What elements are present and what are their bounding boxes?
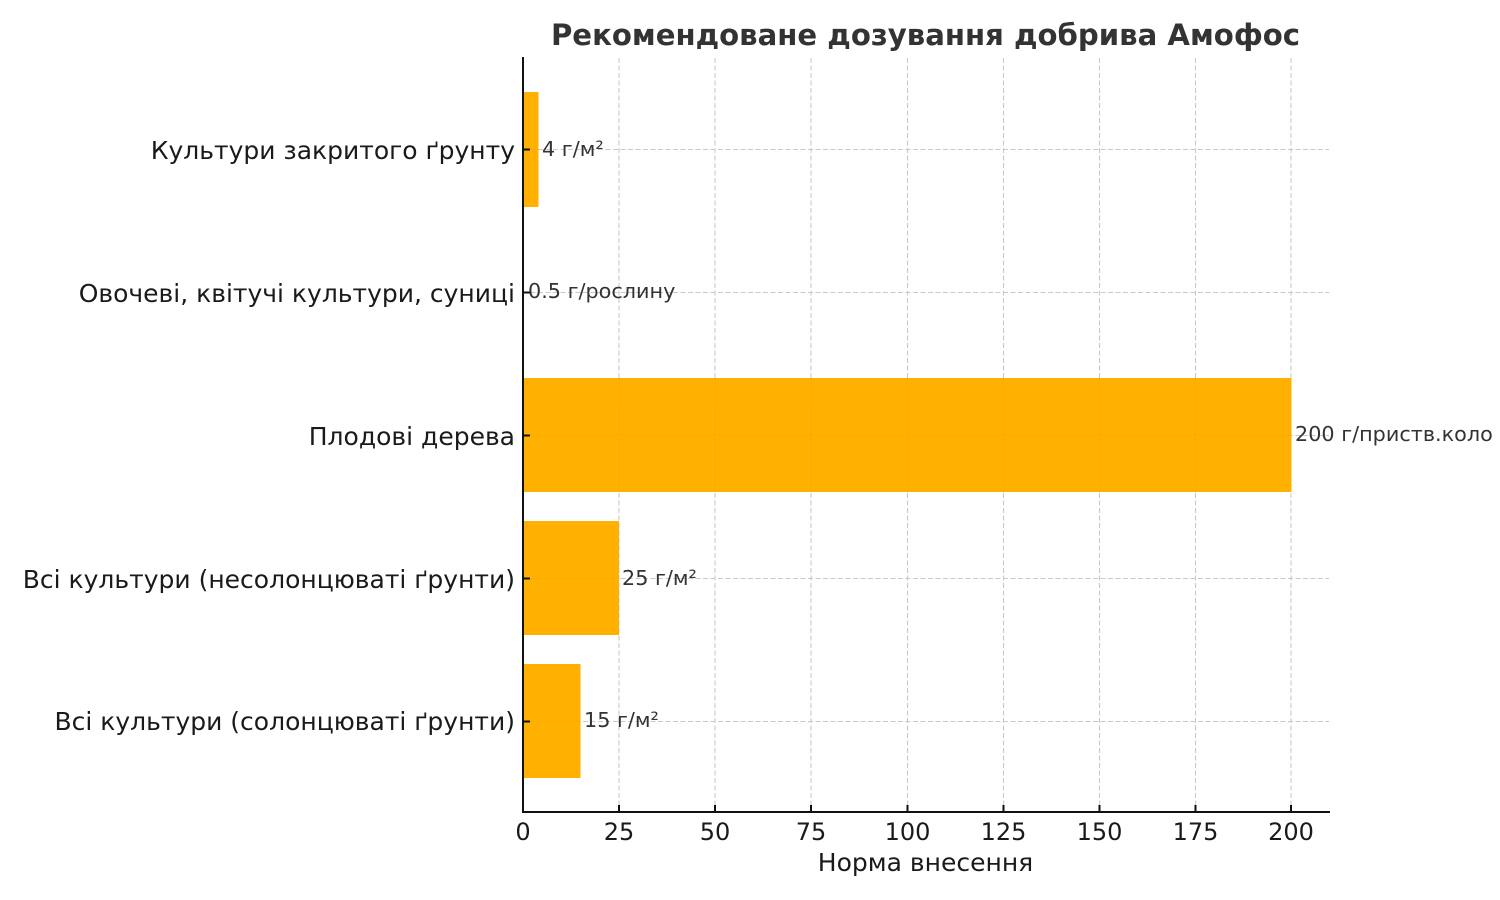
x-axis tick labels (515, 818, 1314, 846)
value labels: 0.5 г/рослину (528, 279, 675, 303)
x-axis tick labels: 75 (796, 818, 826, 846)
x-axis tick labels: 25 (604, 818, 634, 846)
bar: all crops, solonetz soils (523, 664, 580, 778)
value labels: 15 г/м² (584, 708, 659, 732)
x-axis tick labels: 125 (981, 818, 1026, 846)
y-axis category labels: Всі культури (солонцюваті ґрунти) (54, 707, 515, 736)
y-axis category labels: Овочеві, квітучі культури, суниці (79, 279, 515, 308)
x-axis tick labels: 150 (1077, 818, 1122, 846)
y-axis category labels: Культури закритого ґрунту (151, 136, 515, 165)
title: Рекомендоване дозування добрива Амофос (551, 18, 1300, 52)
x-axis tick labels: 200 (1268, 818, 1314, 846)
bars (523, 92, 1292, 778)
x-axis tick labels: 0 (515, 818, 531, 846)
value labels: 4 г/м² (542, 137, 604, 161)
bar: vegetables, flowers, strawberries (523, 235, 525, 350)
y-axis category labels (23, 136, 515, 736)
axes (522, 57, 1330, 813)
y-axis category labels: Всі культури (несолонцюваті ґрунти) (23, 565, 515, 594)
x-axis tick labels: 175 (1173, 818, 1218, 846)
x-axis tick labels: 50 (700, 818, 730, 846)
bar: closed-ground crops (523, 92, 538, 207)
y-axis category labels: Плодові дерева (309, 422, 515, 451)
x-axis title: Норма внесення (818, 848, 1033, 877)
bar: fruit trees (523, 378, 1292, 492)
x-axis tick labels: 100 (885, 818, 930, 846)
bar: all crops, non-solonetz soils (523, 521, 619, 635)
value labels (528, 137, 1493, 732)
value labels: 25 г/м² (622, 566, 697, 590)
value labels: 200 г/приств.коло (1295, 422, 1493, 446)
